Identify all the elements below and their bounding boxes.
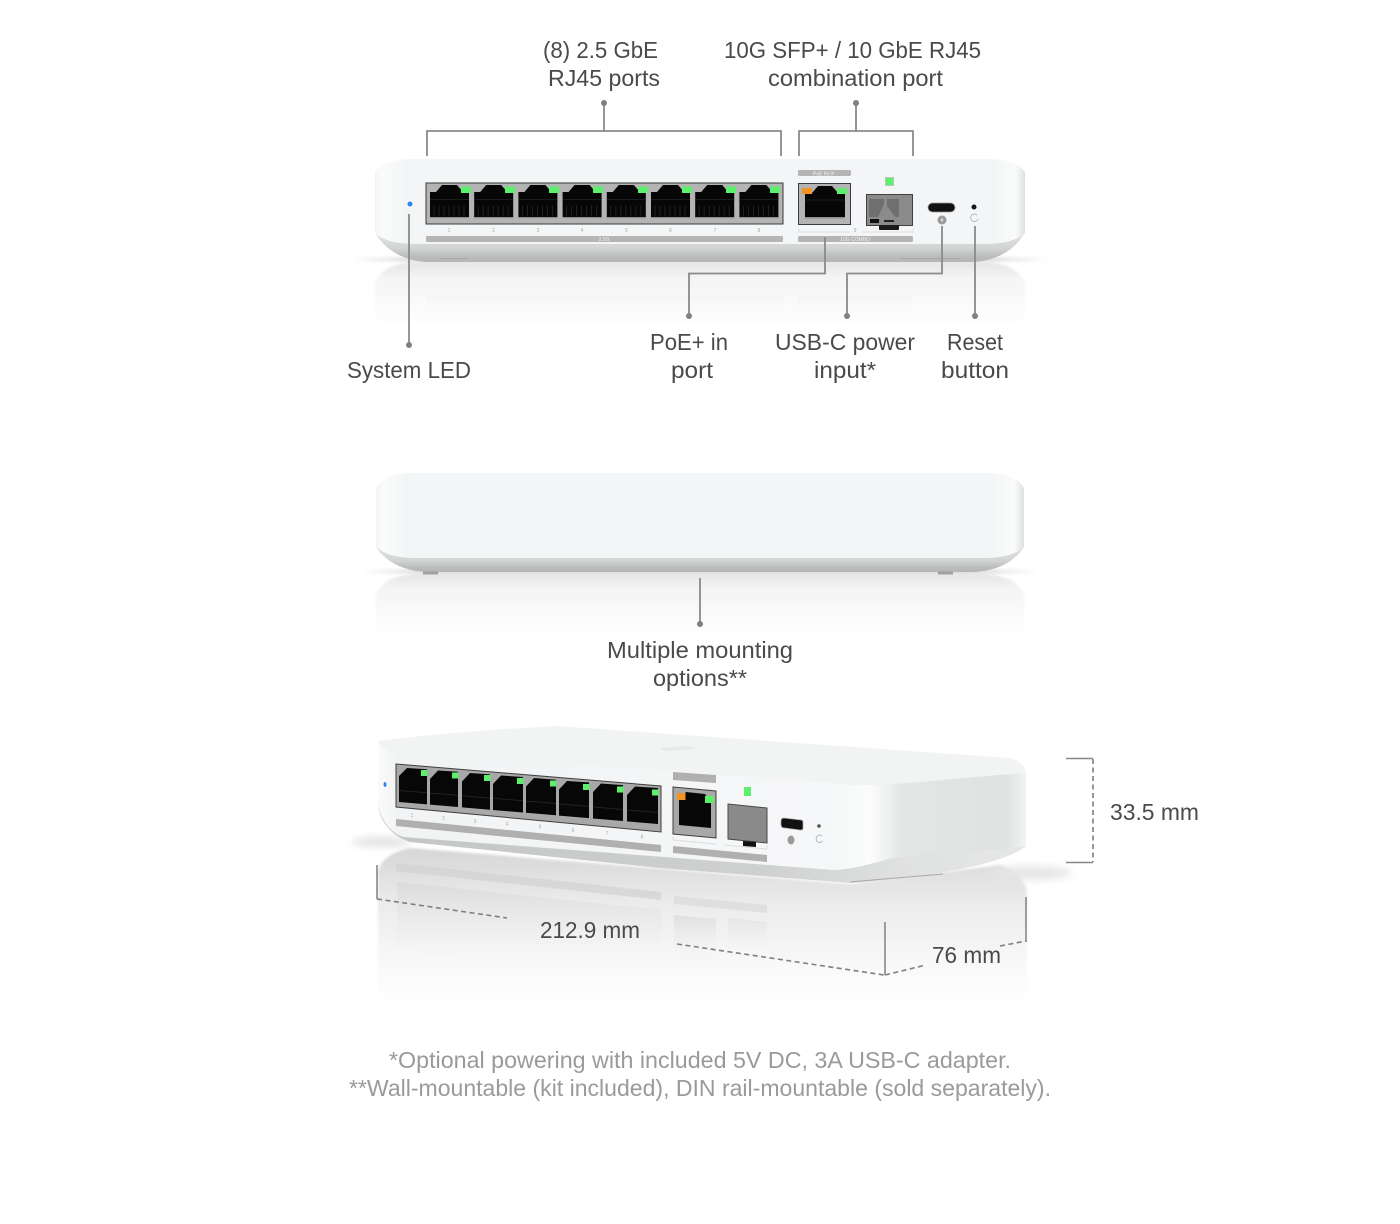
bracket and number: port 9 — [799, 228, 913, 234]
label strip: 10G combo: 10G COMBO — [840, 237, 870, 243]
port: USB-C — [928, 203, 955, 212]
base edge line — [850, 874, 943, 882]
port numbers perspective: 8 — [641, 834, 644, 840]
port numbers perspective — [411, 813, 644, 840]
port panel: eight ports perspective — [396, 764, 661, 832]
label strip: 2.5G perspective — [396, 819, 661, 852]
port: SFP+ perspective — [728, 804, 767, 847]
label: 33.5 mm: 33.5 mm — [1110, 799, 1199, 825]
heading: combination port — [724, 37, 981, 91]
label: mounting: options** — [653, 665, 747, 691]
reflection: rear view — [376, 574, 1024, 640]
icon: power bolt perspective — [788, 836, 794, 844]
port: SFP+ cage — [866, 194, 912, 230]
callout: mounting — [697, 578, 703, 627]
label strip: PoE IN perspective — [673, 772, 716, 783]
port numbers: 4 — [581, 228, 584, 234]
footnotes: *Optional powering with included 5V DC, 3A USB-C adapter. — [389, 1047, 1011, 1073]
icon: reset arrow — [971, 214, 978, 222]
port panel: eight RJ45 ports — [426, 183, 783, 224]
dimension: height — [1066, 758, 1093, 862]
chassis face: rear view — [376, 473, 1024, 558]
reflection: front view — [375, 262, 1025, 330]
dimension: width — [377, 865, 885, 975]
underside: front view — [375, 232, 1025, 262]
port numbers perspective: 4 — [506, 822, 509, 828]
port numbers: 6 — [669, 228, 672, 234]
port numbers: 5 — [625, 228, 628, 234]
port numbers: 3 — [537, 228, 540, 234]
port numbers: 7 — [714, 228, 717, 234]
LED: SFP status — [886, 178, 894, 186]
label: 212.9 mm: 212.9 mm — [540, 917, 640, 943]
port numbers perspective: 2 — [442, 816, 445, 822]
label strip: PoE IN: PoE IN 9* — [813, 172, 835, 178]
footnotes: **Wall-mountable (kit included), DIN rail-mountable (sold separately). — [349, 1075, 1051, 1101]
bracket and number: port 9: 9 — [854, 228, 857, 234]
icon: reset perspective — [816, 835, 822, 843]
heading: 2.5 GbE ports — [543, 37, 660, 91]
heading: 2.5 GbE ports: RJ45 ports — [548, 65, 660, 91]
label strip: 2.5G: 2.5G — [599, 237, 610, 243]
label strip: 10G combo perspective — [673, 846, 767, 862]
device: front view with ports — [350, 159, 1050, 330]
label: system LED: System LED — [347, 357, 471, 383]
port numbers perspective: 7 — [606, 831, 609, 837]
device: rear view — [360, 473, 1040, 640]
port numbers: 2 — [492, 228, 495, 234]
label strip: 10G combo — [798, 236, 913, 243]
chassis face: front view — [375, 159, 1025, 244]
top surface: perspective view — [378, 726, 1026, 795]
heading: combination port: combination port — [768, 65, 944, 91]
port: PoE+ perspective — [673, 787, 716, 838]
icon: power bolt — [938, 216, 946, 224]
label: PoE+ in: port — [671, 357, 714, 383]
LED: SFP perspective — [744, 787, 751, 796]
shadow: perspective view — [352, 837, 1072, 880]
port numbers perspective: 3 — [474, 819, 477, 825]
label: USB-C: USB-C power — [775, 329, 915, 355]
label: mounting — [607, 637, 793, 691]
port numbers — [448, 228, 761, 234]
LED: system perspective — [384, 782, 386, 787]
callout: reset — [972, 226, 978, 319]
label strip: PoE IN — [798, 170, 851, 178]
reflection: perspective view — [378, 848, 1027, 1005]
callout: system LED — [406, 214, 412, 348]
label: USB-C — [775, 329, 915, 383]
front and side faces: perspective view — [378, 741, 1026, 870]
label: PoE+ in — [650, 329, 728, 383]
dimension: depth — [885, 897, 1026, 975]
shadow: rear view — [360, 569, 1040, 574]
port 9 bracket perspective — [673, 837, 767, 849]
port numbers: 8 — [758, 228, 761, 234]
heading: 2.5 GbE ports: (8) 2.5 GbE — [543, 37, 658, 63]
underside: rear view — [376, 547, 1024, 572]
label strip: 2.5G — [426, 236, 783, 243]
label: reset — [941, 329, 1009, 383]
port numbers perspective: 1 — [411, 813, 414, 819]
port: PoE+ in RJ45 — [798, 184, 850, 224]
feet: rear view — [423, 572, 953, 574]
port: USB-C perspective — [781, 818, 803, 830]
port numbers perspective: 5 — [539, 824, 542, 830]
label: 76 mm: 76 mm — [932, 942, 1001, 968]
shadow: front view — [350, 257, 1050, 262]
callout: PoE+ in — [686, 237, 825, 319]
underside: perspective view — [378, 805, 1026, 883]
device: perspective view — [352, 726, 1072, 1005]
logo mark — [660, 746, 696, 751]
callout: combination bracket — [799, 100, 913, 156]
callout: 2.5 GbE bracket — [427, 100, 781, 156]
label: reset: Reset — [947, 329, 1004, 355]
reset button hole — [972, 204, 976, 210]
reset hole perspective — [817, 824, 821, 828]
LED: system — [408, 202, 412, 206]
label: PoE+ in: PoE+ in — [650, 329, 728, 355]
label: reset: button — [941, 357, 1009, 383]
callout: USB-C — [844, 226, 942, 319]
footnotes — [349, 1047, 1051, 1101]
label: mounting: Multiple mounting — [607, 637, 793, 663]
port numbers perspective: 6 — [572, 828, 575, 834]
label: USB-C: input* — [814, 357, 876, 383]
feet: front view — [440, 258, 960, 260]
heading: combination port: 10G SFP+ / 10 GbE RJ45 — [724, 37, 981, 63]
port numbers: 1 — [448, 228, 451, 234]
